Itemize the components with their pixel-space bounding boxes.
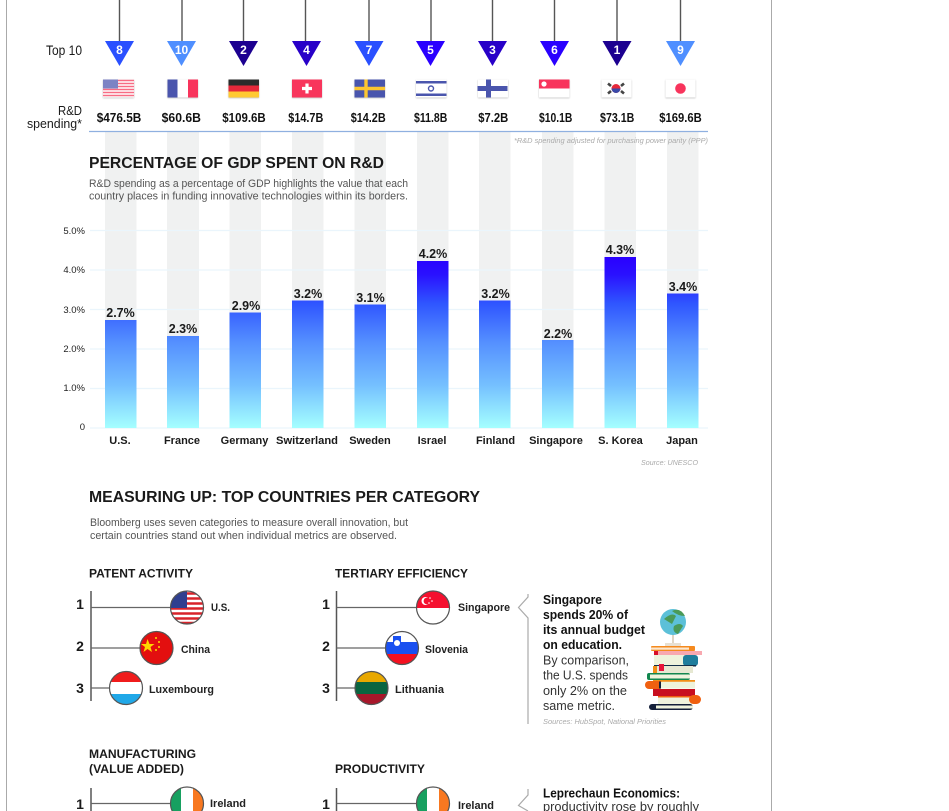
heading: percentage of GDP: PERCENTAGE OF GDP SPENT ON R&D bbox=[89, 155, 384, 172]
flag: Finland bbox=[478, 80, 508, 98]
y axis labels: 1.0% bbox=[63, 383, 86, 394]
spending values: $14.2B bbox=[351, 111, 386, 125]
category labels: Switzerland bbox=[276, 435, 338, 447]
description: percentage of GDP bbox=[89, 178, 408, 202]
value labels: 2.7% bbox=[106, 306, 135, 320]
value labels: 2.2% bbox=[544, 327, 572, 341]
rank triangles: 9 bbox=[677, 43, 684, 57]
category labels: Israel bbox=[418, 435, 446, 447]
callout: Singapore education: on education. bbox=[543, 637, 622, 652]
bracket: Singapore callout bbox=[518, 594, 528, 724]
source: UNESCO: Source: UNESCO bbox=[641, 458, 698, 467]
value labels bbox=[106, 243, 697, 341]
spending values: $7.2B bbox=[478, 111, 508, 125]
value labels: 3.1% bbox=[356, 291, 385, 305]
panel: tertiary efficiency: 3 bbox=[322, 680, 330, 696]
rank triangles: 7 bbox=[366, 43, 373, 57]
heading bbox=[89, 749, 196, 776]
rank triangles: 3 bbox=[489, 43, 496, 57]
value labels: 2.3% bbox=[169, 322, 197, 336]
connector lines from above bbox=[120, 0, 680, 42]
rank triangles: 4 bbox=[303, 43, 310, 57]
panel: manufacturing (value added) bbox=[76, 749, 246, 811]
spending values bbox=[97, 111, 702, 125]
category labels: France bbox=[164, 435, 200, 447]
value labels: 2.9% bbox=[232, 299, 260, 313]
flag: Singapore circle bbox=[417, 592, 449, 608]
heading: TERTIARY EFFICIENCY bbox=[335, 568, 468, 580]
panel: tertiary efficiency bbox=[322, 568, 510, 705]
bars bbox=[105, 257, 698, 428]
row label: R&D spending bbox=[27, 103, 82, 131]
panel: patent activity: China bbox=[181, 644, 211, 656]
panel: patent activity: 3 bbox=[76, 680, 84, 696]
callout: Singapore education: spends 20% of bbox=[543, 607, 629, 622]
callout: Leprechaun Economics: Leprechaun Economics: bbox=[543, 786, 680, 800]
value labels: 4.3% bbox=[606, 243, 634, 257]
category labels: Sweden bbox=[349, 435, 391, 447]
y axis labels: 2.0% bbox=[63, 344, 86, 355]
panel: patent activity: U.S. bbox=[211, 602, 230, 614]
panel: patent activity: 2 bbox=[76, 638, 84, 654]
flag: Switzerland bbox=[292, 80, 322, 98]
flag: France bbox=[168, 80, 198, 98]
flag: Japan bbox=[666, 80, 696, 98]
value labels: 4.2% bbox=[419, 247, 447, 261]
y axis labels: 3.0% bbox=[63, 305, 86, 316]
category labels: Germany bbox=[221, 435, 269, 447]
panel: patent activity: 1 bbox=[76, 596, 84, 612]
description: measuring up bbox=[90, 517, 409, 542]
callout: Singapore education: the U.S. spends bbox=[543, 668, 628, 682]
panel: tertiary efficiency: Singapore bbox=[458, 602, 510, 614]
spending values: $10.1B bbox=[539, 111, 572, 125]
rank triangles: 2 bbox=[240, 43, 247, 57]
spending values: $11.8B bbox=[414, 111, 447, 125]
heading: PRODUCTIVITY bbox=[335, 764, 425, 776]
panel: tertiary efficiency: Slovenia bbox=[425, 644, 469, 656]
callout: Singapore education: only 2% on the bbox=[543, 683, 627, 698]
rank triangles: 10 bbox=[175, 43, 188, 57]
description: measuring up: Bloomberg uses seven categories to measure overall innovation, but bbox=[90, 517, 409, 529]
flag: Singapore bbox=[539, 80, 570, 98]
spending values: $109.6B bbox=[222, 111, 266, 125]
flag: U.S. circle bbox=[171, 592, 203, 624]
callout: Singapore education: Singapore bbox=[543, 592, 602, 607]
panel: productivity bbox=[322, 764, 494, 811]
description: percentage of GDP: R&D spending as a percentage of GDP highlights the value that each bbox=[89, 178, 408, 190]
value labels: 3.2% bbox=[294, 287, 322, 301]
flag: Luxembourg circle bbox=[111, 672, 141, 704]
y axis labels: 4.0% bbox=[63, 265, 86, 276]
panel: tertiary efficiency: 1 bbox=[322, 596, 330, 612]
row label: Top 10: Top 10 bbox=[46, 43, 82, 58]
flag: Germany bbox=[228, 80, 259, 98]
small flags row bbox=[103, 80, 696, 98]
description: percentage of GDP: country places in funding innovative technologies within its borders. bbox=[89, 190, 408, 202]
rank triangles bbox=[105, 41, 695, 66]
grey column backgrounds bbox=[105, 132, 698, 428]
category labels: U.S. bbox=[109, 435, 131, 447]
value labels: 3.2% bbox=[481, 287, 510, 301]
flag: Slovenia circle bbox=[386, 636, 418, 664]
heading: MANUFACTURING bbox=[89, 749, 196, 761]
rank triangles: 6 bbox=[551, 43, 558, 57]
category labels: Singapore bbox=[529, 435, 583, 447]
callout: Singapore education: By comparison, bbox=[543, 652, 629, 668]
category labels: S. Korea bbox=[598, 435, 644, 447]
callout: Singapore education bbox=[543, 592, 666, 726]
bar chart: percentage of GDP bbox=[63, 226, 708, 447]
spending values: $14.7B bbox=[288, 111, 323, 125]
panel: tertiary efficiency: Lithuania bbox=[395, 684, 445, 696]
y axis labels bbox=[63, 226, 86, 433]
spending values: $476.5B bbox=[97, 111, 141, 125]
category labels bbox=[109, 435, 698, 447]
rank triangles: 5 bbox=[427, 43, 434, 57]
flag: China circle bbox=[140, 632, 172, 664]
icon: globe and books bbox=[645, 609, 702, 710]
callout: Singapore education: Sources: HubSpot, National Priorities bbox=[543, 717, 666, 726]
panel: patent activity: Luxembourg bbox=[149, 684, 214, 696]
category labels: Finland bbox=[476, 435, 515, 447]
heading: (VALUE ADDED) bbox=[89, 764, 184, 776]
callout: Singapore education: same metric. bbox=[543, 698, 615, 713]
row label: R&D spending: spending* bbox=[27, 116, 82, 131]
bracket: Leprechaun callout bbox=[518, 789, 528, 811]
flag: Ireland circle bbox=[417, 788, 449, 811]
spending values: $169.6B bbox=[659, 111, 702, 125]
rank triangles: 1 bbox=[614, 43, 621, 57]
panel: manufacturing (value added): Ireland bbox=[210, 798, 246, 810]
heading: PATENT ACTIVITY bbox=[89, 568, 193, 580]
flag: U.S. bbox=[103, 80, 134, 98]
callout: Singapore education: its annual budget bbox=[543, 622, 646, 637]
y axis labels: 0 bbox=[80, 422, 85, 433]
spending values: $73.1B bbox=[600, 111, 634, 125]
panel: tertiary efficiency: 2 bbox=[322, 638, 330, 654]
value labels: 3.4% bbox=[669, 280, 697, 294]
spending values: $60.6B bbox=[162, 111, 201, 125]
y axis labels: 5.0% bbox=[63, 226, 86, 237]
flag: Sweden bbox=[354, 80, 385, 98]
description: measuring up: certain countries stand out when individual metrics are observed. bbox=[90, 530, 397, 542]
divider under spending bbox=[89, 130, 708, 132]
flag: South Korea bbox=[602, 80, 632, 98]
footnote: PPP: *R&D spending adjusted for purchasing power parity (PPP) bbox=[514, 136, 708, 145]
flag: Ireland circle bbox=[171, 788, 203, 811]
row label: R&D spending: R&D bbox=[58, 103, 82, 118]
rank triangles: 8 bbox=[116, 43, 123, 57]
category labels: Japan bbox=[666, 435, 698, 447]
panel: patent activity bbox=[76, 568, 230, 705]
flag: Israel bbox=[416, 80, 446, 98]
heading: measuring up: MEASURING UP: TOP COUNTRIES PER CATEGORY bbox=[89, 489, 480, 506]
flag: Lithuania circle bbox=[356, 672, 388, 704]
callout: Leprechaun Economics bbox=[543, 786, 699, 811]
